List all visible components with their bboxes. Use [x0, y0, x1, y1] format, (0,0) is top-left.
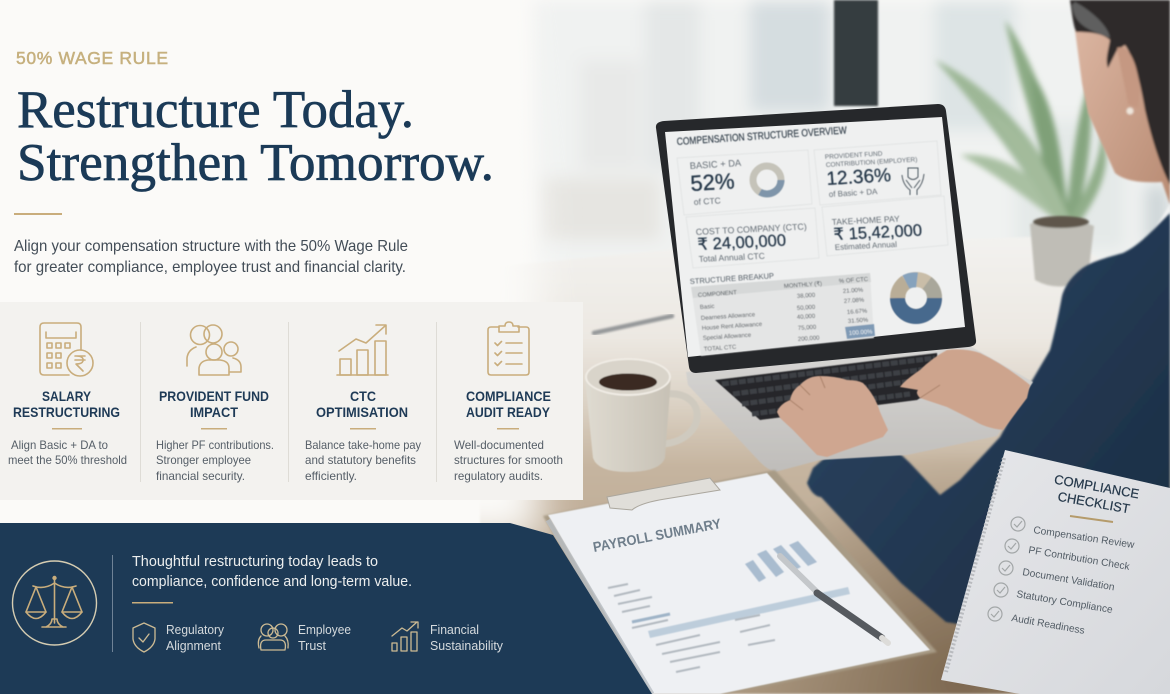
breakup table: Special Allowance: [703, 333, 752, 342]
kpi: take-home pay: [831, 214, 923, 252]
column: provident fund impact: IMPACT: [190, 405, 239, 420]
kpi: basic + da: BASIC + DA: [689, 158, 742, 171]
icon: people: [187, 325, 241, 375]
payroll bars: [745, 541, 817, 582]
card outlines: [677, 141, 948, 268]
checklist items: Compensation Review: [1033, 525, 1136, 551]
kpi: take-home pay: Estimated Annual: [834, 240, 898, 252]
column: ctc optimisation: efficiently.: [305, 469, 357, 483]
checklist items: PF Contribution Check: [1028, 545, 1131, 573]
description: Align Basic + DA to: [11, 438, 108, 452]
laptop lid: [656, 104, 976, 373]
heading: PROVIDENT FUND: [159, 389, 269, 404]
breakup table: COMPONENT: [698, 290, 737, 299]
laptop screen: [665, 117, 965, 357]
breakup table: 200,000: [798, 335, 820, 343]
breakup table: 75,000: [798, 325, 817, 332]
compliance checklist notebook: [941, 450, 1170, 694]
right hand: [900, 349, 1030, 430]
photo: potted plant: [935, 20, 1106, 225]
column: compliance audit ready: [454, 322, 563, 483]
kpi: basic + da: of CTC: [693, 195, 721, 207]
keyboard: [715, 353, 940, 420]
photo: laptop: [656, 104, 1033, 472]
kpi: cost to company: Total Annual CTC: [698, 251, 765, 264]
breakup table: 31.50%: [848, 318, 869, 325]
spiral binding: [946, 458, 1004, 672]
kpi: take-home pay: TAKE-HOME PAY: [831, 214, 900, 227]
column: compliance audit ready: structures for smooth: [454, 453, 563, 467]
breakup table: Basic: [700, 304, 715, 311]
kpi: basic + da: 52%: [689, 168, 735, 196]
paper: [548, 473, 930, 694]
column: provident fund impact: financial security.: [156, 469, 245, 483]
panel: feature columns: [0, 302, 583, 500]
heading: COMPLIANCE: [466, 389, 551, 404]
left hand: [777, 376, 888, 457]
kpi: provident fund: of Basic + DA: [828, 187, 878, 199]
panel: navy footer band: [0, 523, 652, 694]
breakup table: 100.00%: [849, 329, 873, 337]
kpi: provident fund: CONTRIBUTION (EMPLOYER): [826, 157, 918, 169]
item: regulatory alignment: Regulatory: [166, 623, 225, 637]
intro text: for greater compliance, employee trust and financial clarity.: [14, 259, 406, 276]
column: ctc optimisation: [305, 325, 421, 483]
breakup table: 38,000: [797, 293, 816, 300]
breakup donut: [898, 280, 935, 316]
breakup table: 16.67%: [847, 309, 868, 316]
title: Strengthen Tomorrow.: [17, 134, 494, 192]
description: Higher PF contributions.: [156, 438, 274, 452]
breakup table: 21.00%: [843, 288, 864, 295]
column: compliance audit ready: AUDIT READY: [466, 405, 550, 420]
left white fade: [0, 0, 540, 540]
breakup table: 50,000: [797, 305, 816, 312]
description: Balance take-home pay: [305, 438, 421, 452]
item: regulatory alignment: Alignment: [166, 639, 221, 653]
icon: calculator: [40, 323, 93, 376]
photo: office window backdrop: [530, 0, 1170, 270]
column: ctc optimisation: and statutory benefits: [305, 453, 416, 467]
column: compliance audit ready: regulatory audits.: [454, 469, 543, 483]
breakup table: MONTHLY (₹): [784, 280, 822, 290]
screen title: COMPENSATION STRUCTURE OVERVIEW: [676, 125, 847, 148]
photo: window frame: [834, 0, 878, 106]
divider line: [112, 555, 113, 652]
kpi: basic + da: [689, 158, 781, 207]
photo: payroll clipboard: [543, 470, 937, 694]
photo: desk surface: [480, 236, 1170, 694]
item: employee trust: Employee: [298, 623, 351, 637]
column: salary restructuring: meet the 50% threshold: [8, 453, 127, 467]
checklist title: COMPLIANCE: [1053, 472, 1141, 501]
kpi: provident fund: PROVIDENT FUND: [825, 151, 883, 161]
title: [17, 81, 494, 192]
kpi: cost to company: ₹ 24,00,000: [697, 231, 787, 254]
breakup table: 40,000: [797, 314, 816, 321]
payroll pen: [780, 556, 820, 595]
column: salary restructuring: [8, 323, 127, 467]
item: employee trust: [258, 623, 351, 653]
item: employee trust: Trust: [298, 639, 326, 653]
column: provident fund impact: [156, 325, 274, 483]
column: salary restructuring: RESTRUCTURING: [13, 405, 120, 420]
footer message: [132, 554, 412, 590]
photo: pen on desk: [594, 316, 672, 333]
column: ctc optimisation: OPTIMISATION: [316, 405, 408, 420]
kpi: provident fund: 12.36%: [826, 165, 892, 190]
breakup table: STRUCTURE BREAKUP: [689, 271, 774, 286]
item: financial sustainability: Financial: [430, 623, 479, 637]
photo: person suit: [807, 213, 1170, 660]
metal clip: [607, 478, 720, 510]
footer message: Thoughtful restructuring today leads to: [132, 554, 378, 570]
compliance checklist notebook: CHECKLIST: [1057, 489, 1131, 516]
laptop base: [686, 346, 1033, 472]
item: financial sustainability: Sustainability: [430, 639, 504, 653]
title rule: [14, 213, 62, 215]
title: Restructure Today.: [17, 81, 414, 139]
intro text: Align your compensation structure with the 50% Wage Rule: [14, 238, 408, 255]
breakup table: 27.08%: [844, 298, 865, 305]
icon: clipboard checklist: [488, 322, 529, 375]
breakup table: [689, 271, 875, 356]
checklist items: Document Validation: [1022, 567, 1115, 593]
heading: SALARY: [42, 389, 91, 404]
intro text: [14, 238, 408, 276]
breakup table: Dearness Allowance: [701, 312, 756, 322]
screen content: [676, 125, 948, 356]
checklist ticks: [988, 517, 1025, 621]
description: Well-documented: [454, 438, 544, 452]
breakup table: House Rent Allowance: [702, 322, 763, 332]
kpi: cost to company: COST TO COMPANY (CTC): [695, 221, 807, 237]
breakup table: TOTAL CTC: [704, 345, 737, 353]
footer message: compliance, confidence and long-term value.: [132, 574, 412, 590]
photo: plant pot: [1030, 216, 1094, 287]
checklist items: Statutory Compliance: [1016, 589, 1114, 616]
kpi: take-home pay: ₹ 15,42,000: [833, 221, 923, 244]
payroll table: [608, 584, 850, 672]
column: provident fund impact: Stronger employee: [156, 453, 251, 467]
photo: typing hands: [777, 349, 1030, 457]
eyebrow: 50% WAGE RULE: [16, 48, 168, 68]
heading: CTC: [350, 389, 376, 404]
payroll title: PAYROLL SUMMARY: [592, 515, 723, 555]
checklist items: Audit Readiness: [1010, 613, 1085, 637]
photo: person head and hair: [1070, 0, 1170, 238]
icon: scales of justice: [12, 561, 96, 645]
photo: coffee mug: [585, 358, 697, 472]
breakup table: % OF CTC: [839, 277, 869, 285]
kpi: cost to company: [695, 221, 807, 264]
kpi: provident fund: [825, 151, 924, 199]
item: regulatory alignment: [133, 623, 225, 653]
checklist items: [1010, 525, 1136, 637]
item: financial sustainability: [392, 622, 504, 653]
icon: growth chart: [337, 325, 388, 375]
